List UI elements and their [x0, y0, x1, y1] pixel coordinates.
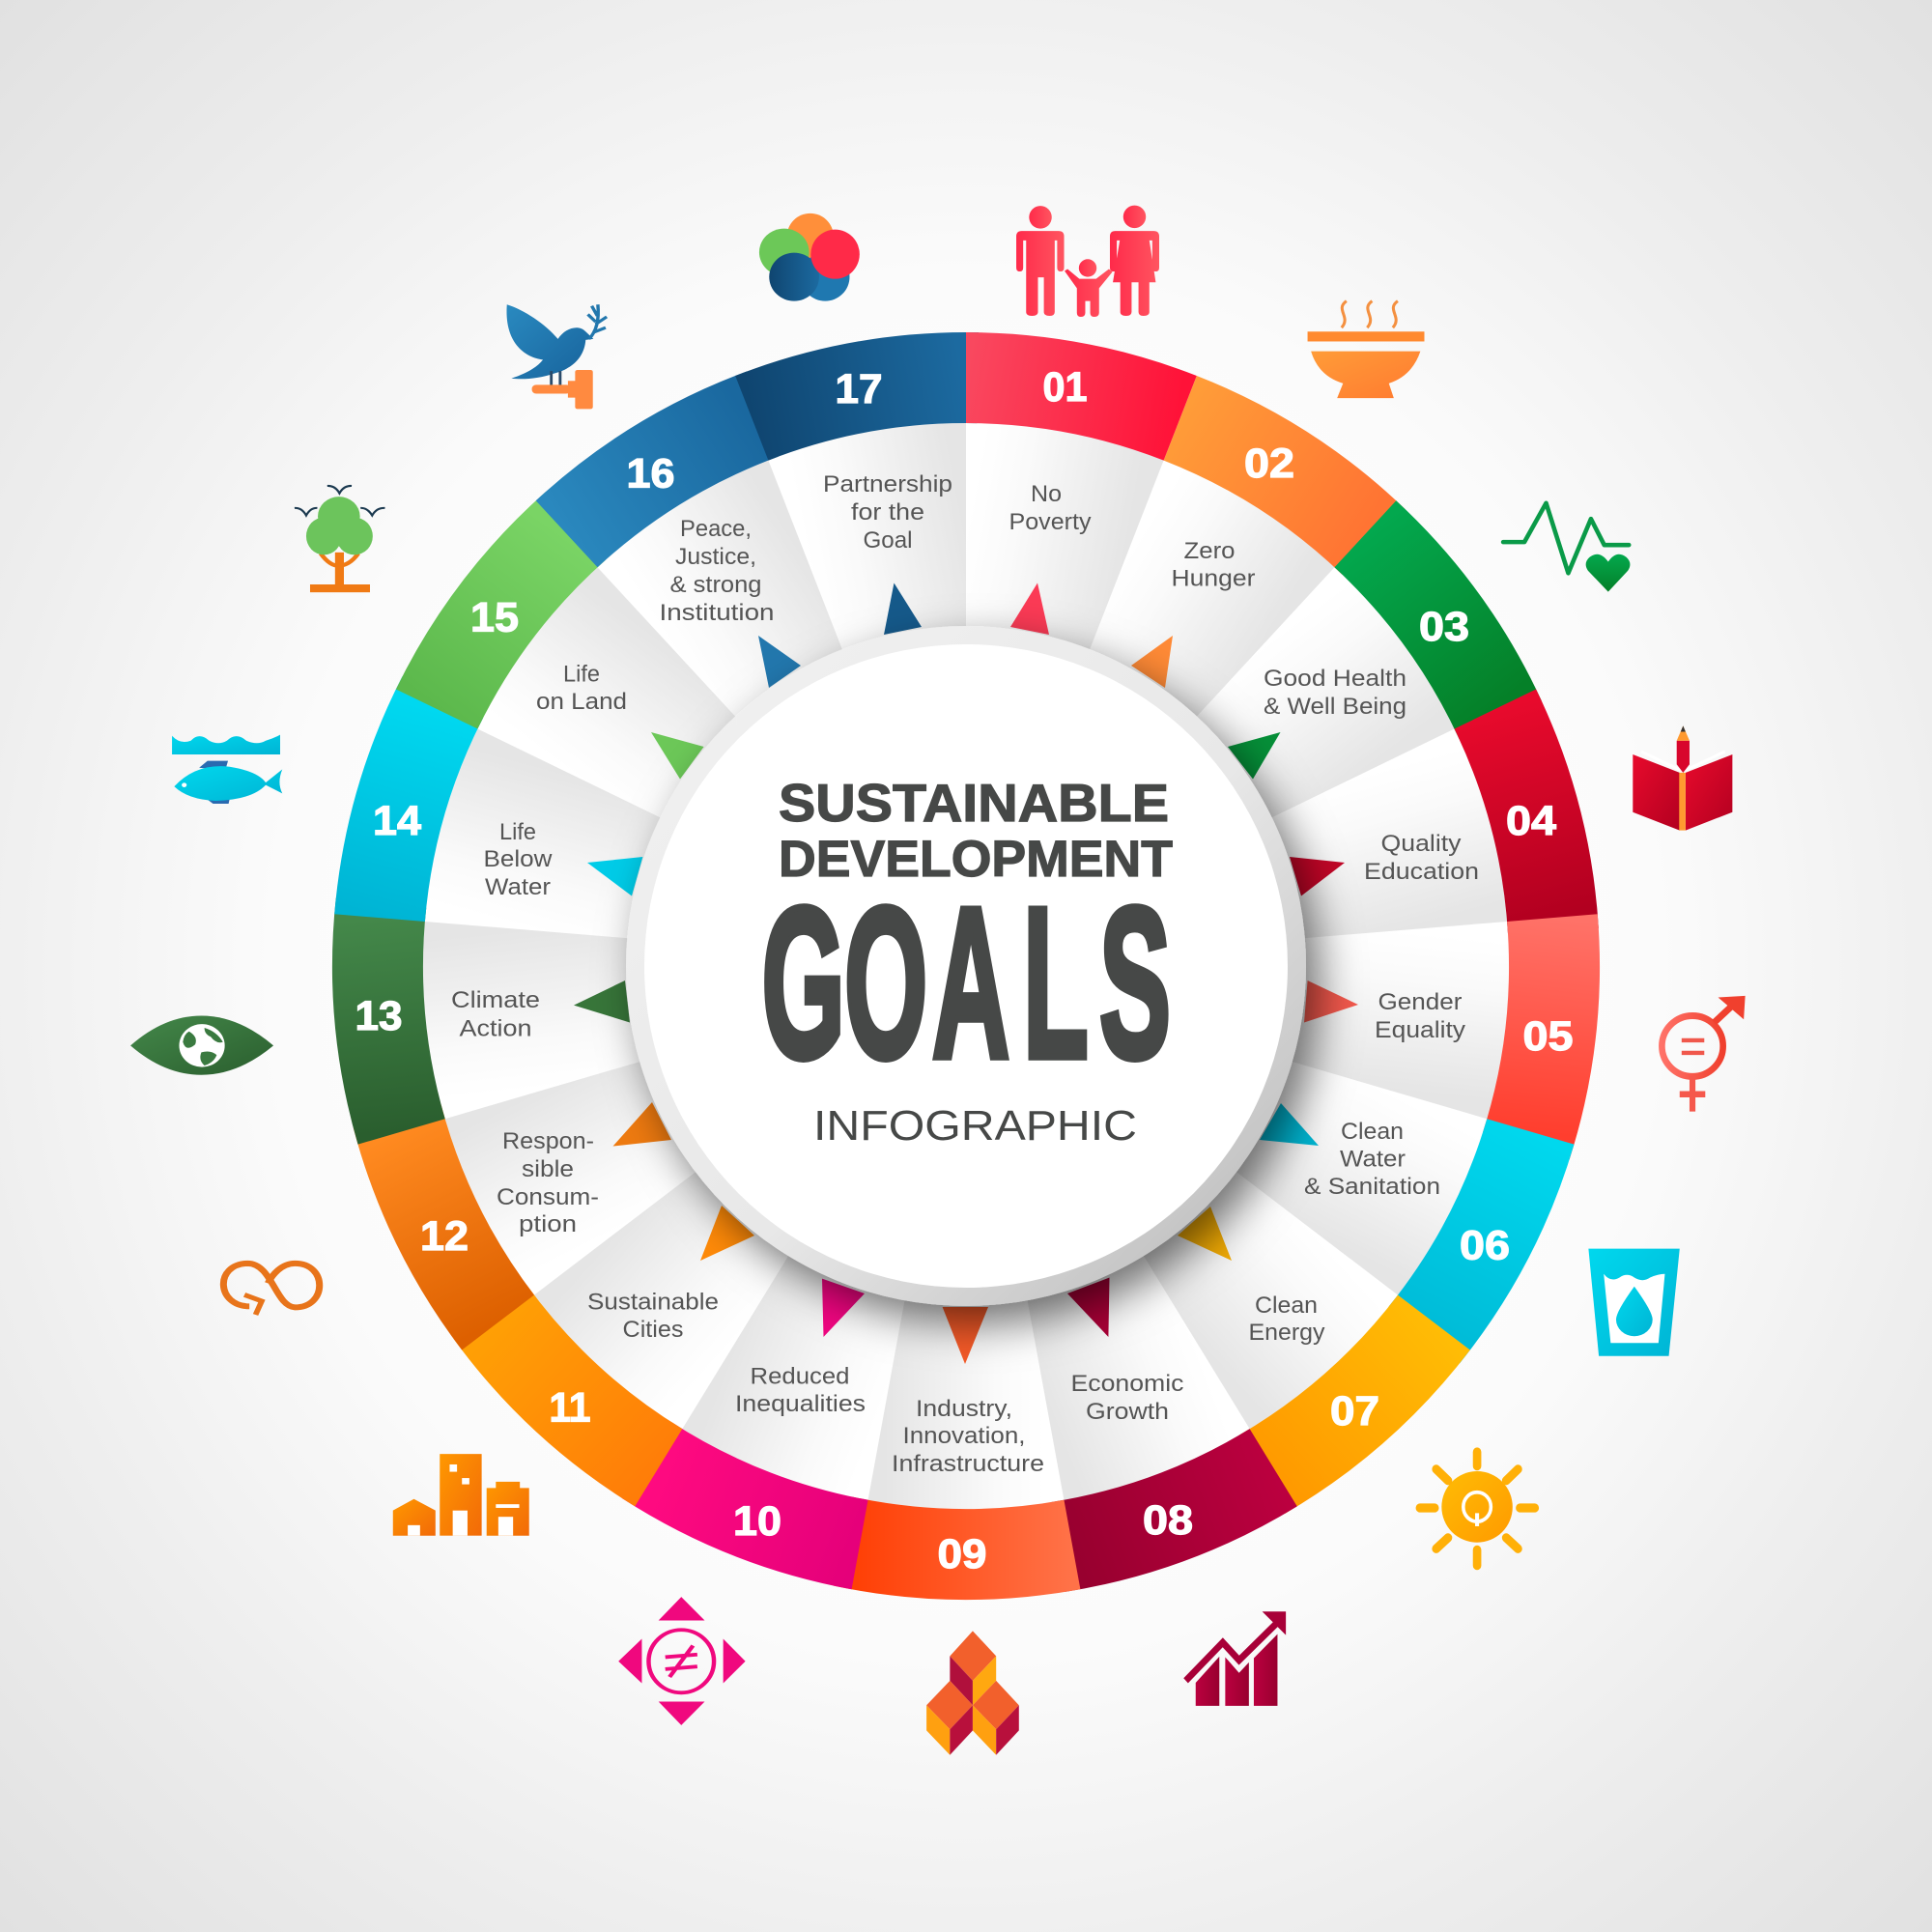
ring numbers: 11 — [549, 1385, 591, 1432]
ring numbers: 09 — [937, 1531, 987, 1577]
ring numbers: 15 — [470, 595, 519, 641]
goal labels: No — [1031, 481, 1062, 507]
goal labels: Equality — [1375, 1017, 1465, 1043]
icon: eye with globe — [130, 1015, 273, 1075]
icon: soup bowl — [1308, 301, 1424, 398]
title: GOALS — [762, 864, 1171, 1103]
ring numbers: 05 — [1522, 1013, 1573, 1060]
goal labels: Innovation, — [902, 1423, 1026, 1449]
ring numbers: 13 — [355, 993, 402, 1039]
sector wedges — [386, 384, 1546, 1538]
coloured ring segments — [290, 288, 1642, 1634]
icon: industry blocks — [926, 1631, 1019, 1755]
icon: book and pencil — [1633, 725, 1732, 831]
goal labels: Justice, — [675, 544, 756, 570]
goal labels: Peace, — [680, 516, 752, 542]
goal labels: for the — [851, 499, 924, 526]
icon: clean energy sun — [1420, 1452, 1535, 1566]
ring numbers: 03 — [1419, 604, 1469, 650]
goal labels: Reduced — [750, 1364, 850, 1389]
goal labels: Clean — [1341, 1119, 1404, 1145]
goal labels: Good Health — [1264, 666, 1406, 692]
goal labels: Consum- — [497, 1184, 599, 1210]
title: INFOGRAPHIC — [813, 1102, 1137, 1150]
goal labels: Life — [499, 819, 536, 845]
goal labels: Goal — [864, 527, 912, 554]
goal labels: & Sanitation — [1304, 1174, 1440, 1200]
ring numbers: 16 — [626, 450, 674, 497]
goal labels: Institution — [659, 600, 775, 626]
ring numbers: 10 — [733, 1498, 781, 1545]
title: SUSTAINABLE — [779, 773, 1169, 833]
icon: clean water glass — [1588, 1249, 1680, 1356]
goal labels: Sustainable — [587, 1289, 719, 1316]
goal labels: Below — [483, 846, 553, 872]
goal labels: Water — [485, 874, 551, 900]
icon: fish and waves — [172, 735, 282, 804]
goal labels: Water — [1340, 1146, 1406, 1173]
icon: heartbeat — [1503, 503, 1630, 592]
goal labels: Life — [563, 661, 600, 688]
goal labels: Poverty — [1009, 509, 1092, 535]
goal labels: Growth — [1086, 1399, 1169, 1425]
icon: family — [1016, 206, 1159, 317]
goal labels: ption — [519, 1211, 577, 1237]
goal labels: Energy — [1248, 1320, 1325, 1346]
ring numbers — [355, 364, 1573, 1577]
icon: infinity loop — [223, 1264, 320, 1315]
ring numbers: 17 — [835, 366, 883, 412]
goal labels: Quality — [1381, 831, 1461, 857]
ring numbers: 07 — [1330, 1388, 1379, 1435]
pointer triangles — [574, 583, 1358, 1364]
ring numbers: 01 — [1043, 364, 1088, 411]
centre disc — [626, 626, 1306, 1306]
goal labels: Clean — [1255, 1293, 1318, 1319]
icon: city buildings — [393, 1454, 529, 1536]
ring numbers: 02 — [1244, 440, 1294, 487]
goal labels: sible — [522, 1156, 574, 1182]
goal labels: on Land — [536, 689, 627, 715]
goal labels: Economic — [1070, 1371, 1184, 1397]
title: DEVELOPMENT — [779, 831, 1173, 888]
ring numbers: 04 — [1506, 798, 1556, 844]
goal labels: Cities — [622, 1317, 684, 1343]
goal labels: Infrastructure — [892, 1451, 1044, 1477]
goal labels: Zero — [1184, 538, 1235, 564]
goal labels: & Well Being — [1264, 694, 1406, 720]
icon: reduced inequalities arrows — [618, 1597, 746, 1725]
icon: peace dove and gavel — [506, 304, 607, 409]
goal labels: Industry, — [916, 1396, 1012, 1422]
icon: growth chart — [1186, 1611, 1286, 1706]
goal labels — [451, 471, 1479, 1477]
goal labels: Respon- — [502, 1128, 594, 1154]
goal labels: Hunger — [1171, 566, 1256, 591]
title — [762, 773, 1173, 1150]
ring numbers: 08 — [1143, 1497, 1193, 1544]
ring numbers: 14 — [373, 798, 421, 844]
goal labels: Education — [1364, 859, 1479, 885]
goal labels: Action — [460, 1016, 531, 1041]
goal labels: Climate — [451, 987, 540, 1013]
icon: tree and birds — [295, 486, 384, 592]
ring numbers: 06 — [1460, 1223, 1510, 1269]
goal labels: Gender — [1378, 989, 1463, 1015]
ring numbers: 12 — [420, 1213, 469, 1260]
goal labels: Partnership — [823, 471, 952, 497]
icon: gender equality — [1662, 996, 1746, 1112]
icon: partnership circles — [759, 213, 860, 301]
goal labels: & strong — [670, 572, 761, 598]
goal labels: Inequalities — [735, 1391, 866, 1417]
